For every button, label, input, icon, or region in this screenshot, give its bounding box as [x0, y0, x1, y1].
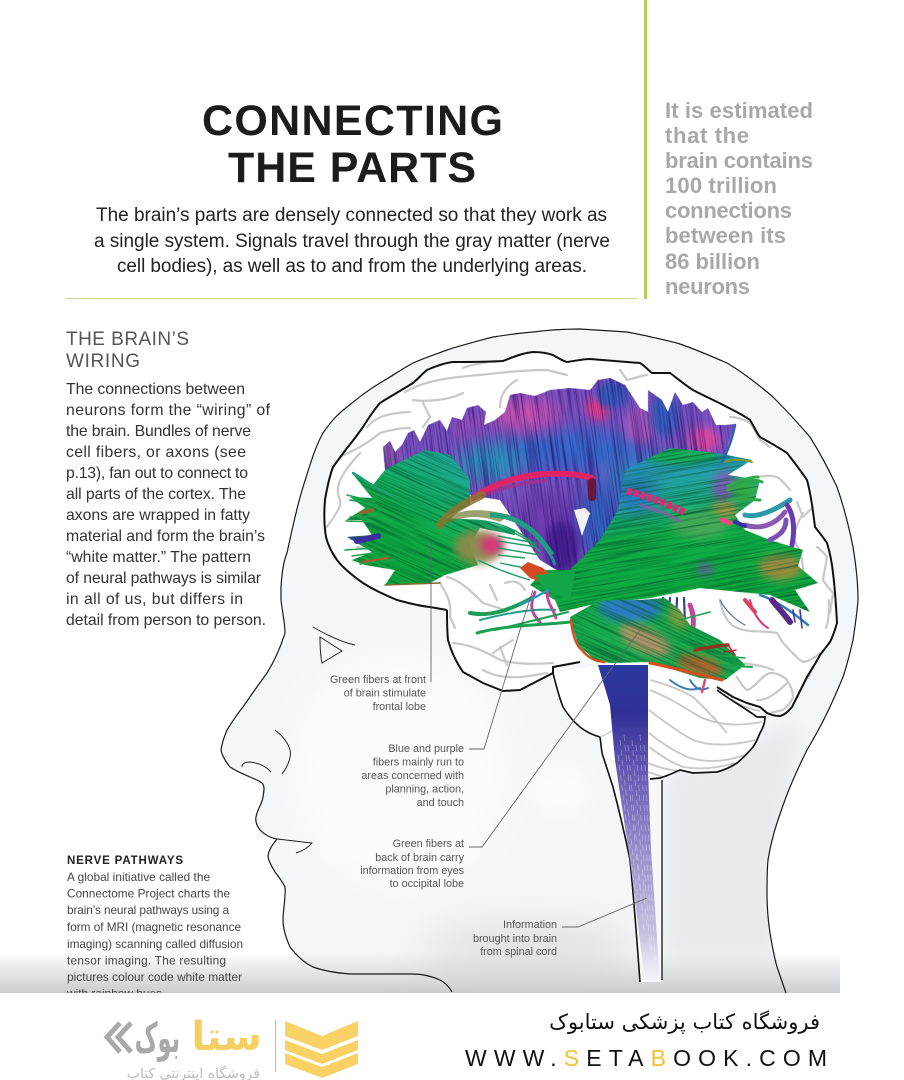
fiber tufts: upper back — [722, 425, 794, 545]
fiber band: pink back patch — [627, 491, 686, 522]
intro text: The brain’s parts are densely connected so that they work as — [96, 205, 607, 226]
head illustration — [0, 318, 861, 993]
side fact: brain contains — [665, 148, 813, 173]
fiber tufts: lower temporal — [470, 590, 570, 633]
text block: wiring: cell fibers, or axons (see — [66, 444, 246, 461]
text block: wiring: detail from person to person. — [66, 612, 266, 629]
green horizontal rule — [66, 298, 637, 299]
fiber node: orange junction — [520, 562, 575, 600]
callout: blue and purple fibers: planning, action, — [385, 784, 464, 796]
text block: nerve pathways — [66, 870, 243, 1000]
section heading: the brain's wiring: WIRING — [66, 351, 140, 372]
brain outline — [324, 352, 837, 716]
fiber band: callosum root — [440, 495, 482, 525]
intro text — [94, 205, 610, 277]
text block: wiring: “white matter.” The pattern — [66, 549, 251, 566]
face outline — [221, 587, 452, 992]
footer band — [0, 993, 904, 1080]
store url: WWW. S ETA B OOK.COM — [465, 1045, 827, 1071]
brain silhouette — [324, 352, 837, 716]
fiber dome: blue and purple fibers — [382, 378, 735, 570]
heading: nerve pathways: NERVE PATHWAYS — [67, 855, 183, 867]
callout: blue and purple fibers: areas concerned with — [361, 770, 464, 782]
spinal interior — [604, 755, 661, 980]
side fact — [665, 98, 813, 299]
logo wordmark: بوک — [135, 1013, 180, 1063]
text block: nerve pathways: imaging) scanning called diffusion — [67, 937, 243, 951]
fiber mass: green back bundle — [530, 448, 818, 612]
fiber mass: green front bundle — [346, 450, 516, 584]
text block: nerve pathways: pictures colour code white matter — [67, 970, 242, 984]
callout: blue and purple fibers — [361, 743, 464, 809]
side fact: that the — [665, 123, 749, 148]
bottom shading — [0, 952, 840, 993]
intro text: a single system. Signals travel through the gray matter (nerve — [94, 231, 610, 252]
neck cavity lines — [553, 673, 640, 982]
callout: green fibers front — [330, 674, 426, 713]
callout: spinal cord — [473, 919, 557, 958]
text block: wiring: material and form the brain’s — [66, 528, 265, 545]
fiber mass: cerebellar bundle — [570, 598, 746, 680]
text block: wiring: neurons form the “wiring” of — [66, 402, 271, 419]
text block: wiring: The connections between — [66, 381, 245, 398]
callout: green fibers front: frontal lobe — [373, 701, 426, 713]
side fact: 100 trillion — [665, 173, 777, 198]
head shading — [290, 650, 800, 976]
text block: nerve pathways: A global initiative called the — [67, 870, 210, 884]
callout: blue and purple fibers: and touch — [417, 797, 464, 809]
text block: nerve pathways: form of MRI (magnetic resonance — [67, 920, 241, 934]
side fact: neurons — [665, 274, 750, 299]
callout: blue and purple fibers: Blue and purple — [388, 743, 464, 755]
logo wordmark — [107, 1013, 262, 1080]
text block: wiring: in all of us, but differs in — [66, 591, 243, 608]
cerebellum folds — [648, 680, 762, 777]
section heading: the brain's wiring — [66, 329, 189, 372]
fiber edges: cerebellar — [571, 612, 752, 692]
fiber tufts: lower back — [662, 595, 808, 640]
cerebellum outline — [650, 690, 765, 779]
callout: green fibers back: Green fibers at — [393, 838, 464, 850]
callout: green fibers front: Green fibers at front — [330, 674, 426, 686]
callout: spinal cord: brought into brain — [473, 933, 557, 945]
side fact: connections — [665, 198, 792, 223]
text block: nerve pathways: with rainbow hues — [66, 986, 162, 1000]
icon: eye — [313, 627, 355, 663]
text block: wiring: the brain. Bundles of nerve — [66, 423, 251, 440]
text block: wiring: of neural pathways is similar — [66, 570, 261, 587]
leader lines — [431, 543, 647, 927]
callout: green fibers back: to occipital lobe — [390, 878, 464, 890]
fiber tufts: front — [345, 473, 440, 585]
side fact: 86 billion — [665, 249, 760, 274]
logo divider — [275, 1020, 276, 1072]
title: CONNECTING — [202, 97, 503, 145]
callout: spinal cord: Information — [503, 919, 557, 931]
fiber band: corpus callosum — [473, 474, 592, 536]
brain sulci — [327, 362, 833, 713]
callout: green fibers back: back of brain carry — [375, 852, 465, 864]
icon: nose — [242, 730, 290, 774]
title: THE PARTS — [228, 144, 476, 192]
logo wordmark: ستا — [191, 1014, 262, 1060]
fiber strands: central crossing — [470, 515, 555, 580]
spinal cord fibers — [598, 665, 660, 982]
head outline — [281, 329, 858, 993]
intro text: cell bodies), as well as to and from the underlying areas. — [117, 256, 587, 277]
text block: nerve pathways: Connectome Project charts the — [67, 886, 230, 900]
head silhouette — [221, 329, 858, 993]
text block: wiring — [66, 381, 271, 629]
text block: wiring: all parts of the cortex. The — [66, 486, 246, 503]
store name: فروشگاه کتاب پزشکی ستابوک — [549, 1010, 820, 1034]
callout: green fibers back: information from eyes — [360, 865, 465, 877]
text block: wiring: p.13), fan out to connect to — [66, 465, 248, 482]
side fact: It is estimated — [665, 98, 813, 123]
text block: nerve pathways: tensor imaging. The resulting — [67, 954, 226, 968]
fiber cluster: frontal pink node — [447, 510, 510, 564]
cerebellum and brain stem area — [553, 665, 765, 982]
green vertical rule — [644, 0, 647, 299]
text block: nerve pathways: brain’s neural pathways using a — [67, 903, 229, 917]
icon: logo chevrons — [285, 1021, 358, 1078]
side fact: between its — [665, 223, 786, 248]
callout: spinal cord: from spinal cord — [480, 946, 557, 958]
callout: green fibers back — [360, 838, 465, 890]
section heading: the brain's wiring: THE BRAIN’S — [66, 329, 189, 350]
callout: green fibers front: of brain stimulate — [344, 688, 426, 700]
title — [202, 97, 503, 192]
callout: blue and purple fibers: fibers mainly run to — [373, 756, 464, 768]
icon: lips — [277, 839, 312, 853]
text block: wiring: axons are wrapped in fatty — [66, 507, 250, 524]
